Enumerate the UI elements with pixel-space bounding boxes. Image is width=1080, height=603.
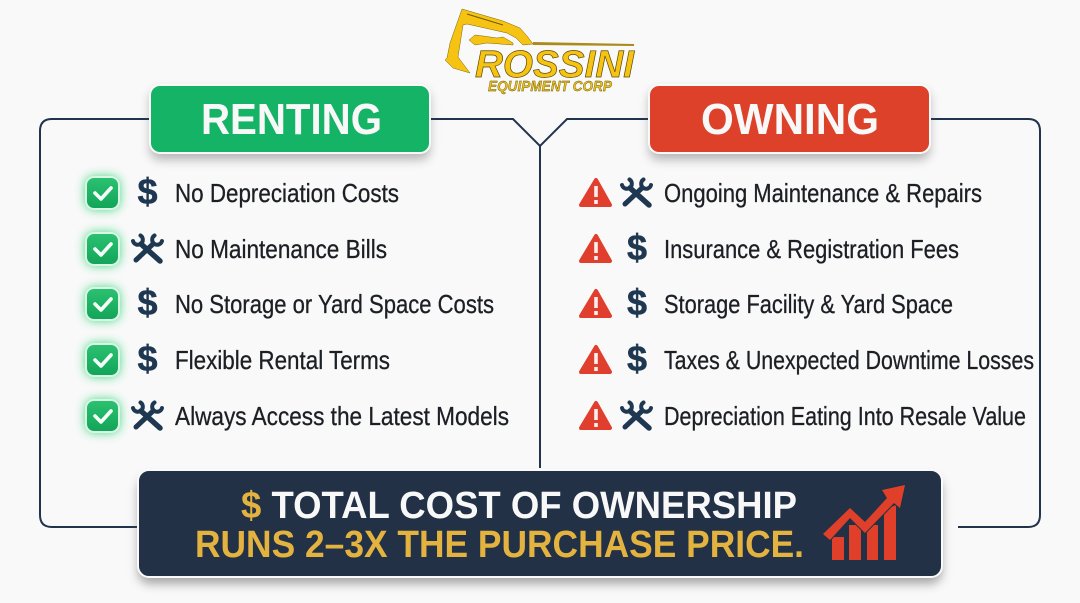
panel: renting benefits <box>85 171 509 433</box>
item: insurance and registration fees <box>581 227 959 268</box>
heading: owning <box>649 85 930 160</box>
item: no storage or yard space costs: No Storage or Yard Space Costs <box>175 289 494 319</box>
item: always access the latest models: Always Access the Latest Models <box>175 401 509 431</box>
item: no depreciation costs: No Depreciation Costs <box>175 178 399 208</box>
icon: rising cost chart <box>823 485 905 560</box>
item: storage facility and yard space: Storage Facility & Yard Space <box>664 289 953 319</box>
item: flexible rental terms: $ <box>137 338 158 379</box>
item: no maintenance bills <box>85 232 387 266</box>
logo: Rossini Equipment Corp: EQUIPMENT CORP <box>488 78 613 95</box>
item: ongoing maintenance and repairs <box>581 178 982 208</box>
panel: owning costs <box>581 178 1034 431</box>
item: no maintenance bills: No Maintenance Bills <box>175 234 387 264</box>
item: insurance and registration fees: Insurance & Registration Fees <box>664 234 959 264</box>
item: storage facility and yard space: $ <box>627 282 647 323</box>
logo: Rossini Equipment Corp <box>445 9 635 95</box>
item: always access the latest models <box>85 399 509 433</box>
item: no depreciation costs <box>85 171 399 212</box>
callout line 1: $ TOTAL COST OF OWNERSHIP <box>241 485 797 527</box>
heading: renting <box>150 85 430 160</box>
item: no storage or yard space costs: $ <box>137 282 158 323</box>
item: storage facility and yard space <box>581 282 953 323</box>
item: no storage or yard space costs <box>85 282 494 323</box>
callout line 2: RUNS 2–3X THE PURCHASE PRICE. <box>195 524 804 566</box>
heading: owning: OWNING <box>701 95 879 144</box>
comparison frame lines <box>40 119 1040 527</box>
callout: total cost of ownership <box>138 470 942 584</box>
item: insurance and registration fees: $ <box>627 227 647 268</box>
item: taxes and unexpected downtime losses: $ <box>627 338 647 379</box>
item: no depreciation costs: $ <box>137 171 158 212</box>
item: flexible rental terms <box>85 338 390 379</box>
logo: Rossini Equipment Corp: ROSSINI <box>475 44 635 86</box>
item: taxes and unexpected downtime losses <box>581 338 1034 379</box>
heading: renting: RENTING <box>201 95 382 144</box>
item: ongoing maintenance and repairs: Ongoing Maintenance & Repairs <box>664 178 982 208</box>
item: flexible rental terms: Flexible Rental Terms <box>175 345 390 375</box>
